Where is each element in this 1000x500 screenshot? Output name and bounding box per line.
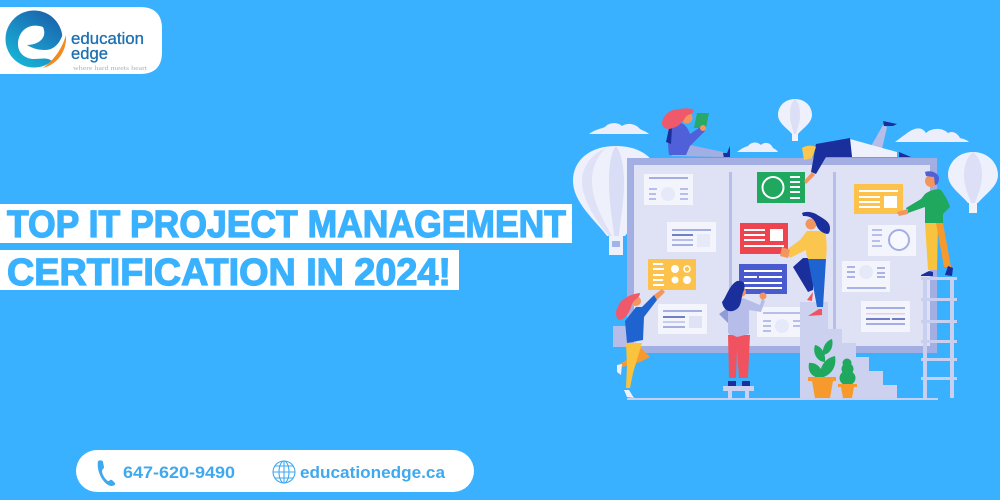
icon: globe (273, 461, 295, 483)
balloon left (573, 146, 659, 255)
figure: man with yellow card (897, 171, 953, 276)
ladder (921, 277, 957, 398)
logo wordmark: education (71, 29, 144, 48)
phone number: 647-620-9490 (123, 463, 235, 482)
cloud right (895, 128, 969, 142)
card: green (757, 172, 805, 203)
logo panel (0, 7, 162, 74)
card: yellow top-right (854, 184, 903, 214)
illustration (573, 99, 998, 400)
logo swirl mark (6, 10, 70, 68)
card: white text (667, 222, 716, 252)
card: white bottom-left (658, 304, 707, 334)
card: white right (842, 261, 890, 292)
contact pill (76, 450, 474, 492)
website: educationedge.ca (300, 463, 446, 482)
card: white bottom-center (757, 307, 805, 337)
card: white lower right (861, 301, 910, 332)
figure: woman on stool (719, 281, 766, 399)
card: yellow left (648, 259, 696, 290)
title line 2: CERTIFICATION IN 2024! (7, 252, 451, 294)
logo wordmark (71, 29, 147, 72)
card: blue (739, 264, 787, 294)
board (627, 158, 937, 353)
plant large (808, 339, 836, 398)
cloud left (589, 123, 649, 134)
card: white ring (868, 225, 916, 256)
figure: woman on stairs (780, 212, 830, 316)
balloon right (948, 152, 998, 213)
figure: man lying on board (802, 121, 911, 184)
cloud small (737, 142, 778, 152)
figure: woman at left pointing (613, 289, 665, 398)
title line 1: TOP IT PROJECT MANAGEMENT (7, 204, 566, 246)
card: white chart top-left (644, 174, 693, 205)
card: red (740, 223, 788, 254)
ground line (627, 398, 938, 400)
plant small (838, 358, 857, 398)
balloon top (778, 99, 812, 141)
title (0, 204, 572, 294)
logo wordmark: where hard meets heart (73, 65, 147, 72)
logo wordmark: edge (71, 44, 108, 63)
figure: woman reading (662, 108, 730, 157)
icon: phone (98, 460, 115, 486)
stairs (800, 302, 897, 398)
